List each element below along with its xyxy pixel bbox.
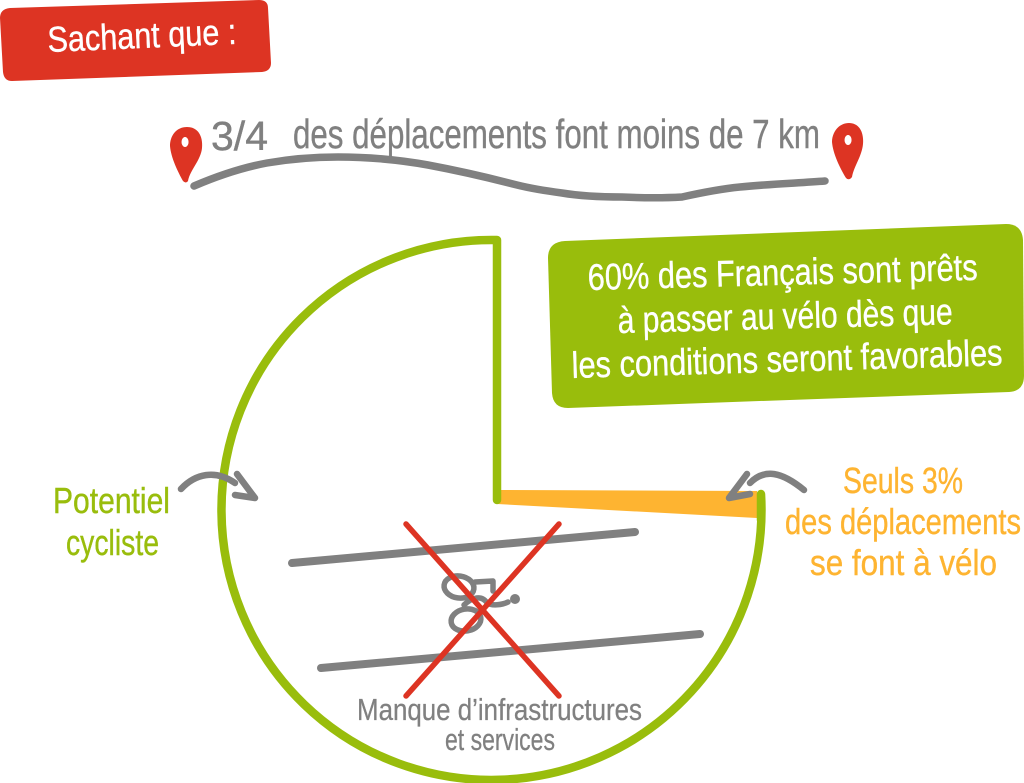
icon: right map pin xyxy=(832,123,863,179)
callout: 60 percent of French: à passer au vélo dès que xyxy=(617,291,953,341)
route text: des déplacements font moins de 7 km xyxy=(293,111,820,157)
arrow: potential to pie xyxy=(181,474,255,498)
orange slice: 3 percent xyxy=(497,490,757,518)
route text xyxy=(211,111,820,159)
label: Potentiel cycliste: Potentiel xyxy=(53,480,170,521)
red cross xyxy=(406,524,559,696)
route: 3/4 of trips under 7 km xyxy=(170,111,863,198)
road lines xyxy=(292,532,700,668)
green pie outline xyxy=(221,240,761,780)
callout: 60 percent of French xyxy=(548,224,1024,408)
label: 3 percent of trips: Seuls 3% xyxy=(843,460,963,501)
label: Potentiel cycliste: cycliste xyxy=(66,522,159,563)
illustration: missing infrastructure xyxy=(292,524,700,757)
label: 3 percent of trips xyxy=(785,460,1021,583)
icon: cyclist xyxy=(443,574,520,633)
heading badge: Sachant que: Sachant que : xyxy=(47,11,237,60)
route text: 3/4 xyxy=(211,113,268,159)
infrastructure caption xyxy=(357,692,642,757)
icon: left map pin xyxy=(170,127,202,182)
arrow: 3 percent to slice xyxy=(729,474,804,498)
label: 3 percent of trips: se font à vélo xyxy=(810,542,997,583)
pie chart: cycling potential xyxy=(221,240,761,780)
label: Potentiel cycliste xyxy=(53,480,170,563)
route line xyxy=(194,157,825,198)
heading badge: Sachant que xyxy=(0,0,271,81)
infrastructure caption: Manque d’infrastructures xyxy=(357,692,642,727)
infrastructure caption: et services xyxy=(445,722,555,757)
